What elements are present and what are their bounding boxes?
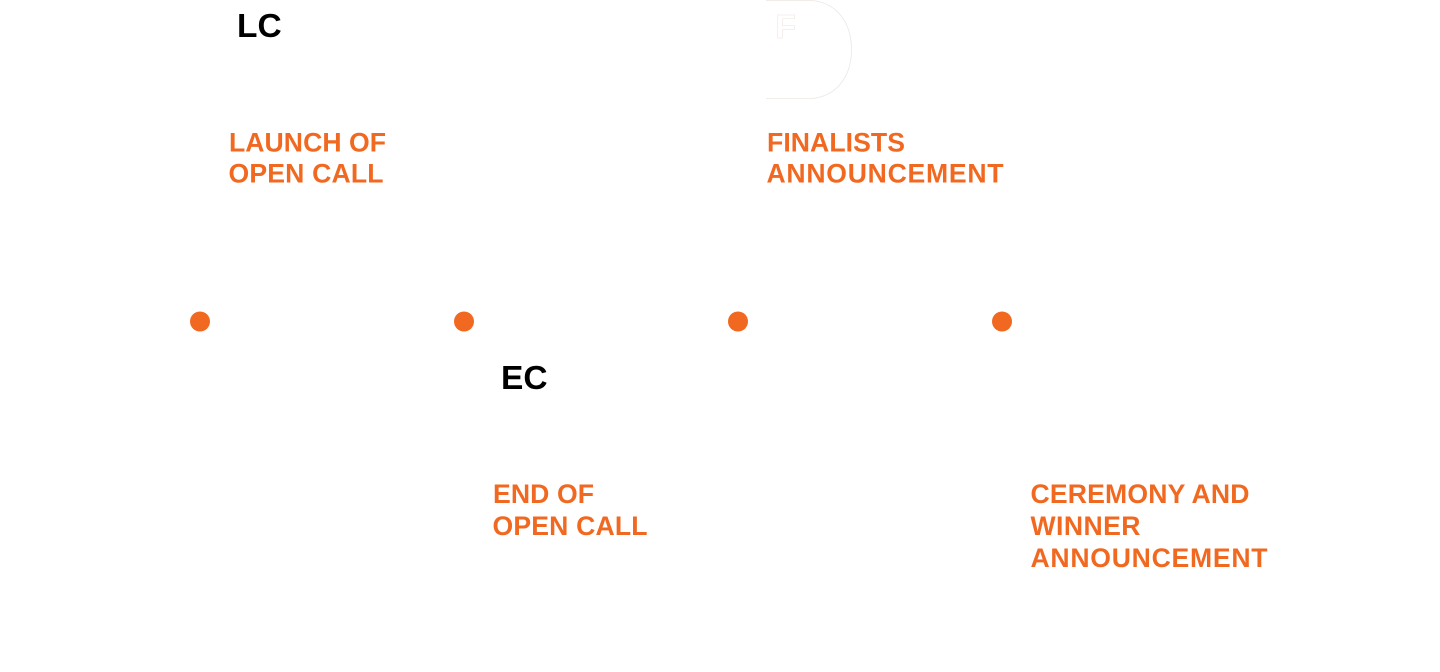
timeline dot 2	[454, 312, 474, 332]
label: ceremony and winner announcement: CEREMONY AND	[1030, 479, 1250, 509]
timeline dot 4	[992, 312, 1012, 332]
label: launch of open call: OPEN CALL	[228, 158, 384, 188]
label: ceremony and winner announcement: WINNER	[1030, 511, 1140, 541]
timeline dot 3	[728, 312, 748, 332]
label: launch of open call: LAUNCH OF	[229, 128, 386, 158]
milestone 2: end of open call	[492, 360, 648, 541]
milestone 3: finalists announcement	[766, 0, 1004, 188]
label: ceremony and winner announcement	[1030, 479, 1268, 573]
label: finalists announcement: ANNOUNCEMENT	[766, 158, 1004, 188]
timeline dot 1	[190, 312, 210, 332]
abbreviation: EC: EC	[501, 360, 548, 397]
label: end of open call: OPEN CALL	[492, 511, 648, 541]
label: launch of open call	[228, 128, 386, 188]
faint abbreviation: F: F	[776, 9, 796, 46]
abbreviation: LC: LC	[237, 8, 282, 45]
label: finalists announcement: FINALISTS	[767, 128, 905, 158]
label: end of open call: END OF	[493, 479, 594, 509]
faint badge outline	[766, 0, 852, 98]
label: finalists announcement	[766, 128, 1004, 188]
label: end of open call	[492, 479, 648, 541]
milestone 1: launch of open call	[228, 8, 386, 188]
label: ceremony and winner announcement: ANNOUNCEMENT	[1030, 543, 1268, 573]
